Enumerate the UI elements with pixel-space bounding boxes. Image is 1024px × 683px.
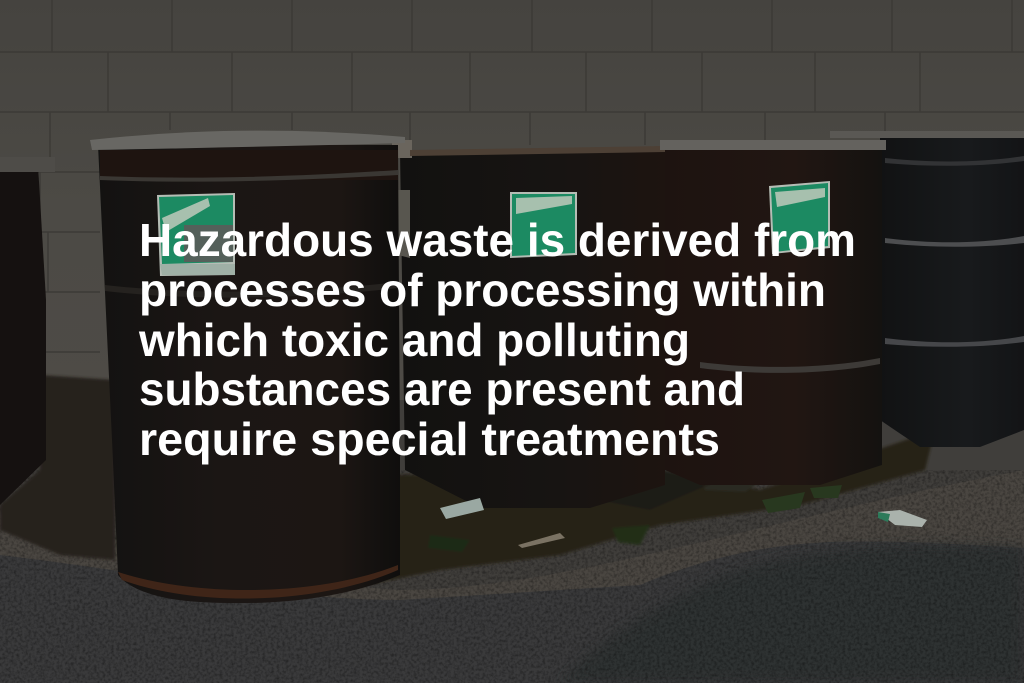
ground <box>0 400 1024 683</box>
green hazardous waste label <box>157 193 235 276</box>
green hazardous waste label <box>510 192 577 258</box>
headline text: processes of processing within <box>139 264 826 316</box>
weeds and debris at the base of the barrels <box>0 375 935 585</box>
far right barrel <box>830 131 1024 447</box>
headline text: Hazardous waste is derived from <box>139 214 856 266</box>
wall <box>0 0 1024 420</box>
litter <box>440 485 927 548</box>
far left barrel <box>0 157 55 505</box>
large left barrel <box>90 131 405 603</box>
green hazardous waste label <box>769 181 830 254</box>
center barrel <box>392 140 665 508</box>
headline text: which toxic and polluting <box>138 314 690 366</box>
headline text: require special treatments <box>139 413 720 465</box>
headline text: substances are present and <box>139 363 745 415</box>
center-right barrel <box>660 140 886 485</box>
